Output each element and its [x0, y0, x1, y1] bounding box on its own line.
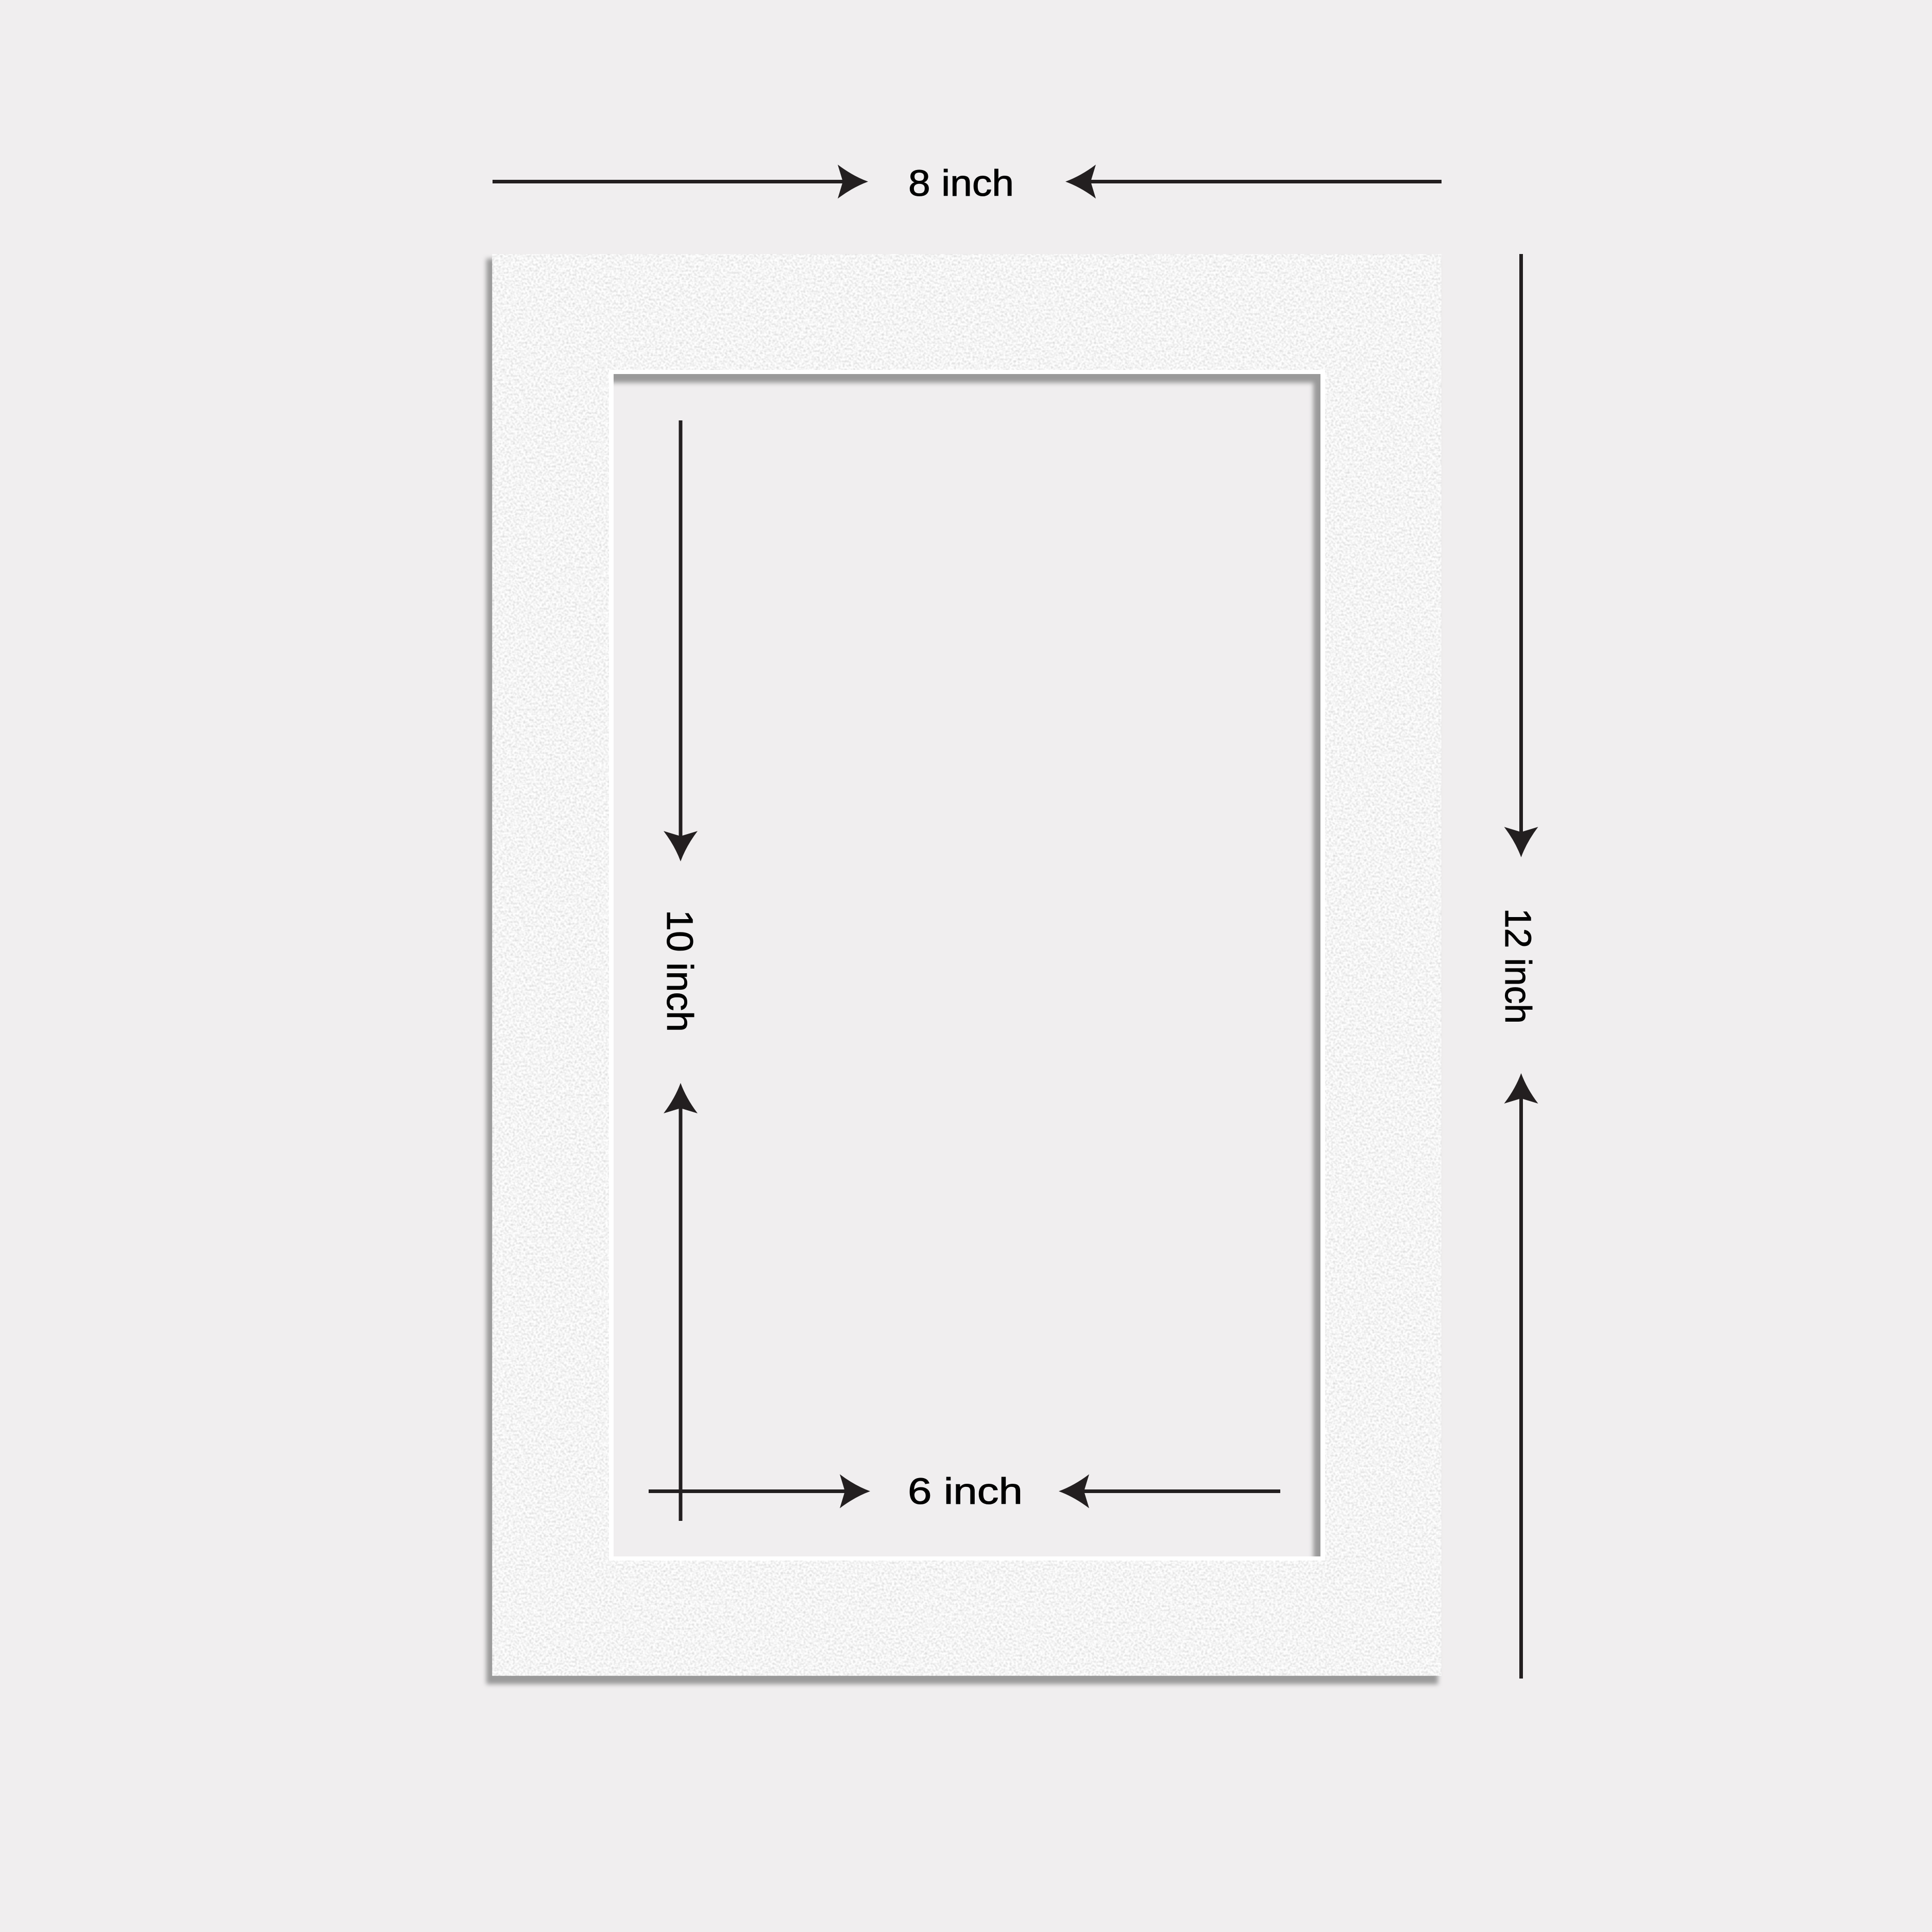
arrow: inner right pointing left [1059, 1475, 1280, 1509]
arrow: inner left pointing right [649, 1475, 870, 1509]
mat board with paper texture [492, 254, 1442, 1676]
panel: white photo mat frame [486, 254, 1442, 1684]
arrow: top left pointing right [493, 165, 868, 199]
label: 8 inch: 8 inch [908, 163, 1014, 204]
window opening [614, 374, 1320, 1556]
inner vertical dimension: 10 inch [659, 420, 700, 1521]
white bevel around opening [609, 370, 1325, 1561]
arrow: right lower pointing up [1504, 1073, 1538, 1679]
label: 12 inch: 12 inch [1497, 908, 1538, 1024]
right dimension: 12 inch [1497, 254, 1538, 1679]
arrow: right upper pointing down [1504, 254, 1538, 857]
label: 6 inch: 6 inch [908, 1471, 1023, 1512]
arrow: top right pointing left [1065, 165, 1442, 199]
label: 10 inch: 10 inch [659, 910, 700, 1032]
inner horizontal dimension: 6 inch [649, 1471, 1280, 1512]
arrow: inner lower pointing up [664, 1083, 698, 1521]
arrow: inner upper pointing down [664, 420, 698, 861]
top dimension: 8 inch [493, 163, 1442, 204]
outer mat shadow [486, 259, 1438, 1684]
